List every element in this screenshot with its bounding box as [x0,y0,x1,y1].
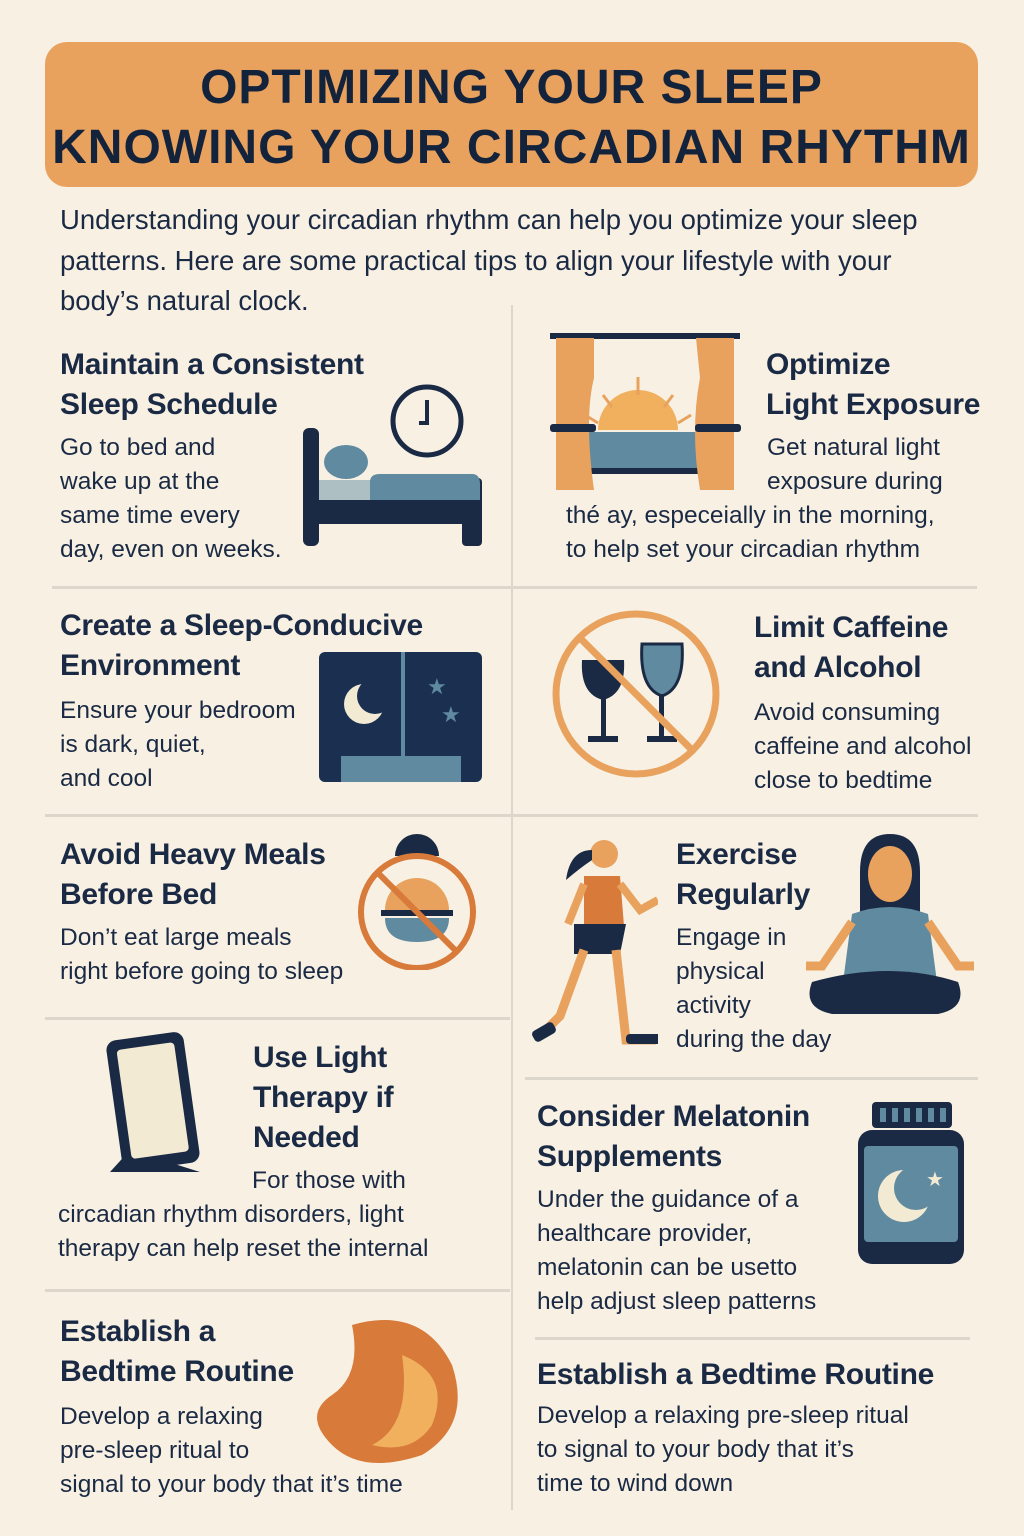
heading: Use Light [253,1041,387,1074]
text: pre-sleep ritual to [60,1437,249,1464]
heading: Establish a Bedtime Routine [537,1358,934,1391]
text [676,924,832,1053]
icon: runner [532,840,658,1044]
text [60,697,296,792]
panel: heavy meals [60,838,343,985]
heading: Before Bed [60,878,217,911]
intro text: body’s natural clock. [60,285,309,316]
heading: Limit Caffeine [754,611,948,644]
text [60,1403,403,1498]
text: Under the guidance of a [537,1186,799,1213]
title banner [45,42,978,187]
text: melatonin can be usetto [537,1254,797,1281]
text: For those with [252,1167,406,1194]
heading: Needed [253,1121,360,1154]
heading: Sleep Schedule [60,388,278,421]
text: Avoid consuming [754,699,940,726]
intro text [60,204,918,316]
heading [754,611,948,684]
text: and cool [60,765,153,792]
text: Don’t eat large meals [60,924,292,951]
icon: no meal [358,834,476,970]
panel: light therapy: therapy can help reset the internal [58,1235,428,1262]
heading [60,348,364,421]
heading: Optimize [766,348,890,381]
heading [253,1041,394,1154]
heading: and Alcohol [754,651,921,684]
text: activity [676,992,751,1019]
text: healthcare provider, [537,1220,752,1247]
text [767,434,943,495]
text: time to wind down [537,1470,733,1497]
icon: melatonin jar [858,1102,964,1264]
text: to signal to your body that it’s [537,1436,854,1463]
panel: caffeine and alcohol [754,611,972,794]
heading: Establish a [60,1315,215,1348]
text: right before going to sleep [60,958,343,985]
heading: Maintain a Consistent [60,348,364,381]
heading [60,1315,294,1388]
title banner: KNOWING YOUR CIRCADIAN RHYTHM [52,121,971,174]
text [60,434,282,563]
heading: Bedtime Routine [60,1355,294,1388]
heading [60,838,326,911]
panel: exercise [676,838,832,1053]
icon: melatonin jar: ★ [926,1169,944,1191]
intro text: patterns. Here are some practical tips to align your lifestyle with your [60,244,891,276]
icon: night window: ★ [441,702,461,727]
icon: window with sunrise [550,333,741,490]
panel: sleep-conducive environment [60,609,423,792]
panel: light exposure [566,348,980,563]
text: day, even on weeks. [60,536,282,563]
text [754,699,972,794]
text: help adjust sleep patterns [537,1288,816,1315]
heading: Environment [60,649,240,682]
panel: melatonin [537,1100,816,1315]
heading: Regularly [676,878,810,911]
icon: night window: ★ [427,674,447,699]
heading: Therapy if [253,1081,393,1114]
text: wake up at the [60,468,219,495]
text: Get natural light [767,434,940,461]
text: close to bedtime [754,767,932,794]
panel: bedtime routine right [537,1358,934,1497]
panel: consistent sleep schedule [60,348,364,563]
heading: Light Exposure [766,388,980,421]
heading: Avoid Heavy Meals [60,838,326,871]
text [60,924,343,985]
intro text: Understanding your circadian rhythm can help you optimize your sleep [60,204,918,235]
panel: light therapy: circadian rhythm disorders, light [58,1201,404,1228]
text: signal to your body that it’s time [60,1471,403,1498]
icon: light box [106,1032,200,1172]
icon: no drinks [552,610,720,778]
icon: orange moon blob [317,1320,458,1463]
text: is dark, quiet, [60,731,206,758]
text: Engage in [676,924,786,951]
text: Go to bed and [60,434,215,461]
text [537,1186,816,1315]
text: physical [676,958,765,985]
text: Ensure your bedroom [60,697,296,724]
text: Develop a relaxing [60,1403,263,1430]
heading: Create a Sleep-Conducive [60,609,423,642]
heading [537,1100,810,1173]
heading [766,348,980,421]
panel: light therapy [58,1041,428,1262]
heading: Supplements [537,1140,722,1173]
icon: bed and clock [303,384,482,546]
heading [676,838,810,911]
panel: bedtime routine left [60,1315,403,1498]
title banner: OPTIMIZING YOUR SLEEP [200,61,823,114]
heading: Exercise [676,838,797,871]
text: same time every [60,502,240,529]
panel: light exposure: thé ay, especeially in the morning, [566,502,935,529]
icon: meditation [806,834,974,1014]
text [537,1402,909,1497]
text: exposure during [767,468,943,495]
icon: night window [319,652,482,782]
panel: light exposure: to help set your circadian rhythm [566,536,920,563]
text: caffeine and alcohol [754,733,972,760]
heading: Consider Melatonin [537,1100,810,1133]
text: during the day [676,1026,831,1053]
heading [60,609,423,682]
text: Develop a relaxing pre-sleep ritual [537,1402,909,1429]
